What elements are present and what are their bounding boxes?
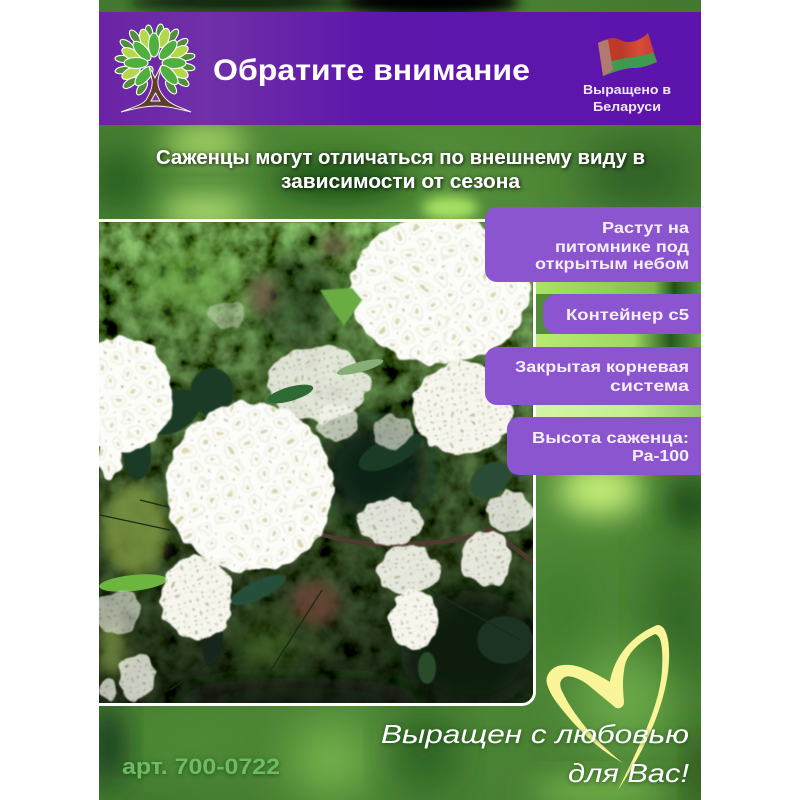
branches: [305, 530, 533, 562]
feature pill: seedling height: Ра-100: [632, 448, 689, 465]
feature pill: seedling height: [507, 417, 701, 475]
feature pill: closed root system: Закрытая корневая: [515, 359, 689, 376]
feature pill: open-air nursery: Растут на: [602, 220, 689, 237]
feature pill: closed root system: [485, 347, 701, 405]
article number: арт. 700-0722: [122, 754, 280, 779]
feature pill: container: Контейнер с5: [566, 307, 689, 324]
notice text: зависимости от сезона: [281, 171, 521, 193]
purple header band: [99, 12, 701, 125]
feature pill: closed root system: система: [610, 378, 689, 395]
sunlit grass, brick and shadow patches: [98, 233, 540, 722]
notice text: [156, 147, 645, 193]
leaves over flowers: [320, 288, 362, 326]
slogan: для Вас!: [568, 758, 689, 788]
notice text: Саженцы могут отличаться по внешнему виду в: [156, 147, 645, 169]
title: Обратите внимание: [213, 54, 530, 87]
flower clusters: [72, 216, 533, 702]
feature pill: open-air nursery: питомнике под: [555, 239, 689, 256]
icon: hand-drawn heart: [546, 625, 669, 790]
feature pill: container: [543, 294, 701, 334]
slogan: Выращен с любовью: [381, 719, 689, 749]
caption: grown in Belarus: [583, 82, 671, 114]
icon: Belarus flag: [598, 33, 657, 76]
dark leaves: [123, 368, 533, 684]
slogan: [381, 719, 689, 788]
green bokeh background: [88, 0, 715, 800]
bright leaf strip: [99, 574, 166, 592]
feature pill: open-air nursery: открытым небом: [535, 256, 689, 273]
caption: grown in Belarus: Беларуси: [593, 99, 661, 114]
photo: white viburnum flowers: [72, 216, 540, 722]
feature pill: open-air nursery: [485, 207, 701, 282]
feature pill: seedling height: Высота саженца:: [532, 430, 689, 447]
caption: grown in Belarus: Выращено в: [583, 82, 671, 97]
logo: tree: [115, 24, 195, 112]
